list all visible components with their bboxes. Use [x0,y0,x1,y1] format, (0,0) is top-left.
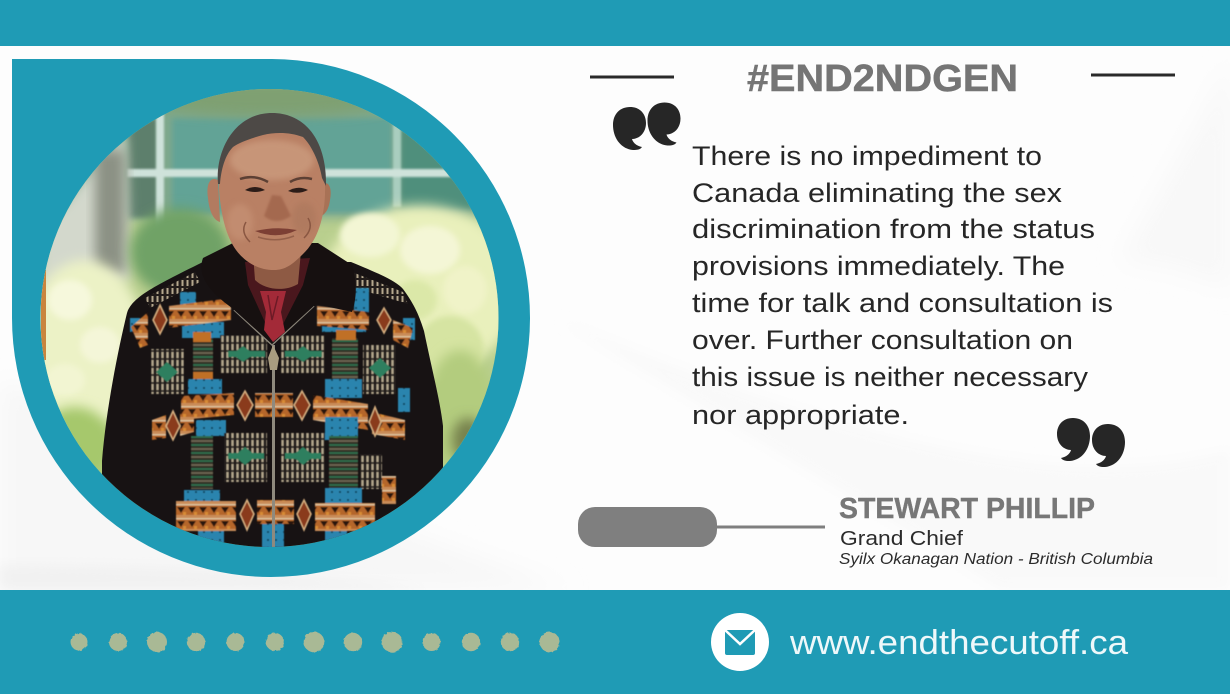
quote text: time for talk and consultation is [692,288,1113,318]
mouth [255,228,297,235]
quote text: Canada eliminating the sex [692,178,1063,208]
quote text: discrimination from the status [692,214,1095,244]
quote text: There is no impediment to [692,141,1042,171]
nose [264,195,291,221]
speaker title: Grand Chief [840,528,963,550]
head [207,113,331,289]
icon: envelope [711,613,769,671]
website url: www.endthecutoff.ca [789,624,1128,662]
jacket bands [130,288,415,548]
eyes [245,187,265,192]
quote text: nor appropriate. [692,400,909,430]
quote text [692,141,1113,430]
collar, shirt and tie [201,243,356,344]
quote text: provisions immediately. The [692,251,1065,281]
heading [590,58,1175,100]
jacket [102,262,443,560]
portrait photo [40,89,498,547]
teal teardrop frame [12,59,530,577]
zipper [272,345,275,550]
portrait badge [12,59,530,577]
quote text: this issue is neither necessary [692,362,1089,392]
attribution [578,493,1153,568]
pale left bush [40,255,140,431]
top banner [0,0,1230,46]
hair [218,113,326,186]
icon: closing quote [1057,418,1125,467]
face [219,122,325,270]
pale right bush [327,196,498,360]
ears [207,179,220,222]
heading: #END2NDGEN [747,58,1018,100]
decorative dot row [70,632,560,652]
icon: opening quote [613,102,680,150]
footer banner [0,590,1230,694]
speaker nation: Syilx Okanagan Nation - British Columbia [839,551,1153,568]
green bush [130,208,230,296]
photo backdrop [25,80,520,548]
shoulder strips [145,272,200,308]
quote text: over. Further consultation on [692,325,1073,355]
speaker name: STEWART PHILLIP [839,493,1095,525]
name tag pill and connector [578,507,825,547]
